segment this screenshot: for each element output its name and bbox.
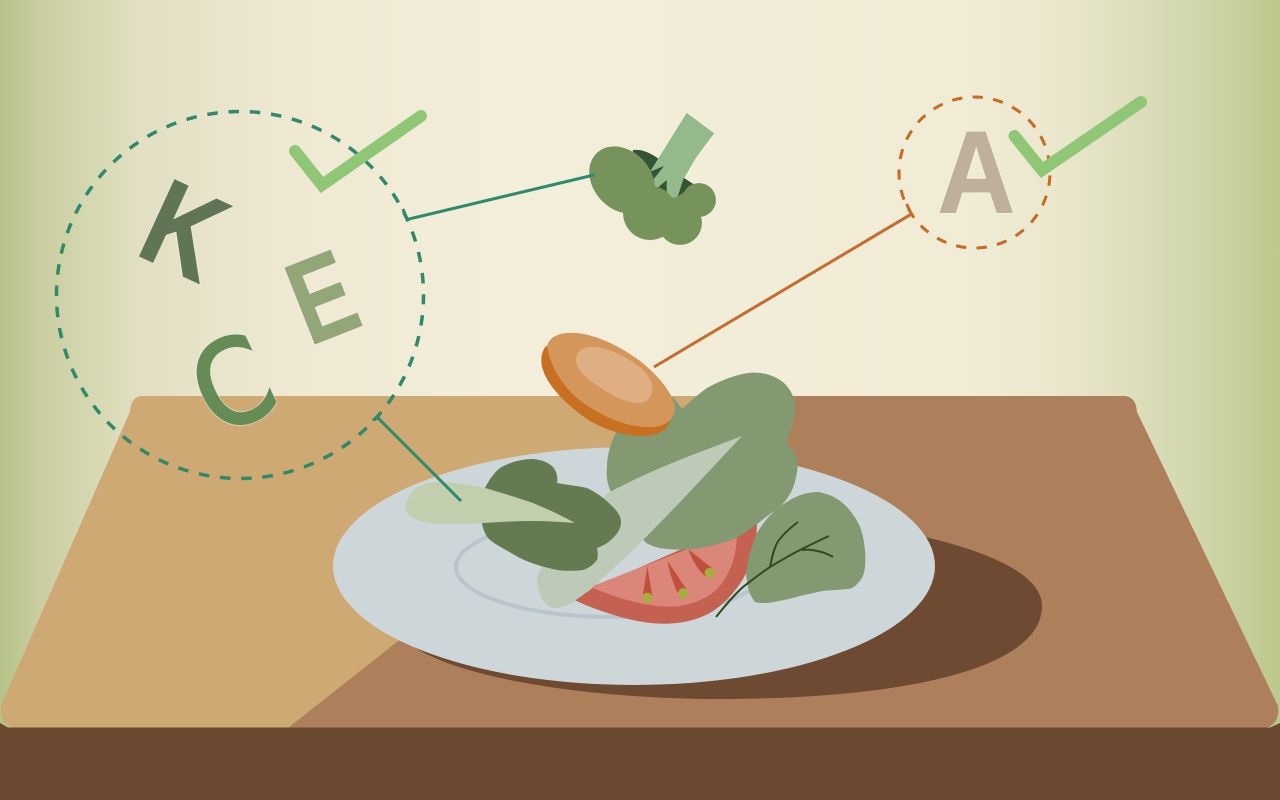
small basil leaf with stem xyxy=(716,492,865,617)
carrot slice xyxy=(541,333,675,436)
broccoli xyxy=(576,113,716,245)
pale long leaf left xyxy=(405,482,575,524)
letter A: A xyxy=(937,107,1015,238)
plate shadow xyxy=(405,537,1042,699)
tomato slice xyxy=(570,516,757,624)
letter E: E xyxy=(270,225,375,370)
check mark: A xyxy=(1014,102,1141,170)
check mark: group xyxy=(295,116,421,185)
connector: leaf to group circle xyxy=(373,414,461,501)
large green leaf xyxy=(607,373,798,550)
letter C: C xyxy=(172,309,295,462)
vitamin group circle xyxy=(56,112,424,478)
letter K: K xyxy=(123,153,246,308)
plate xyxy=(333,447,935,685)
connector: broccoli to group circle xyxy=(403,175,594,220)
table top xyxy=(1,396,1278,728)
table front edge xyxy=(0,723,1280,800)
connector: carrot to vitamin A xyxy=(654,204,912,367)
vitamin A circle xyxy=(899,97,1050,248)
pale long leaf right xyxy=(537,436,742,608)
dark green leaf xyxy=(482,459,621,571)
